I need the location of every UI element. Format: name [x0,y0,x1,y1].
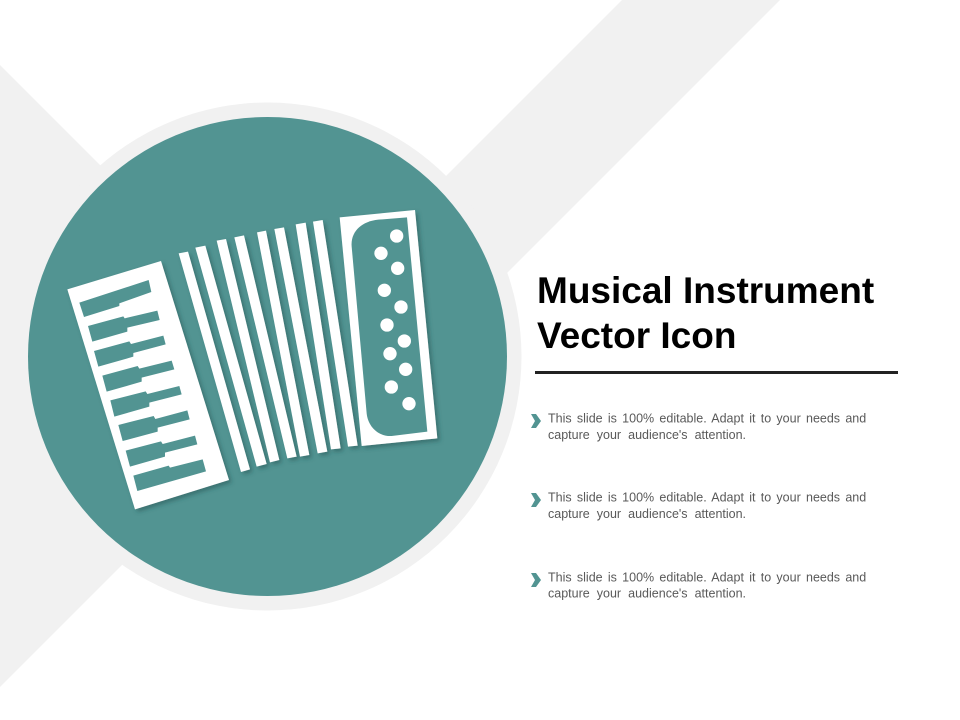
chevron 2 [531,493,541,507]
accordion keyboard [67,261,229,509]
icon: accordion [67,210,437,509]
bullet text 2: capture your audience's attention. [548,507,746,521]
accordion bellows [179,220,358,472]
title: Musical Instrument [537,270,874,311]
bullet text 1: This slide is 100% editable. Adapt it to your needs and [548,412,866,426]
bullet text 3: capture your audience's attention. [548,586,746,600]
chevron 3 [531,573,541,587]
bullet text 2: This slide is 100% editable. Adapt it to your needs and [548,490,866,504]
circle outer ring [14,102,522,610]
chevron 1 [531,414,541,428]
bullet 1 [531,412,866,442]
accordion button panel [340,210,437,446]
bullet text 3: This slide is 100% editable. Adapt it to your needs and [548,570,866,584]
title rule [535,371,898,374]
background diagonal band [242,0,780,380]
title: Vector Icon [537,315,736,356]
bullet 3 [531,570,866,600]
bullet text 1: capture your audience's attention. [548,428,746,442]
bullet 2 [531,490,866,521]
teal circle [28,117,507,596]
background left triangle [0,65,311,687]
